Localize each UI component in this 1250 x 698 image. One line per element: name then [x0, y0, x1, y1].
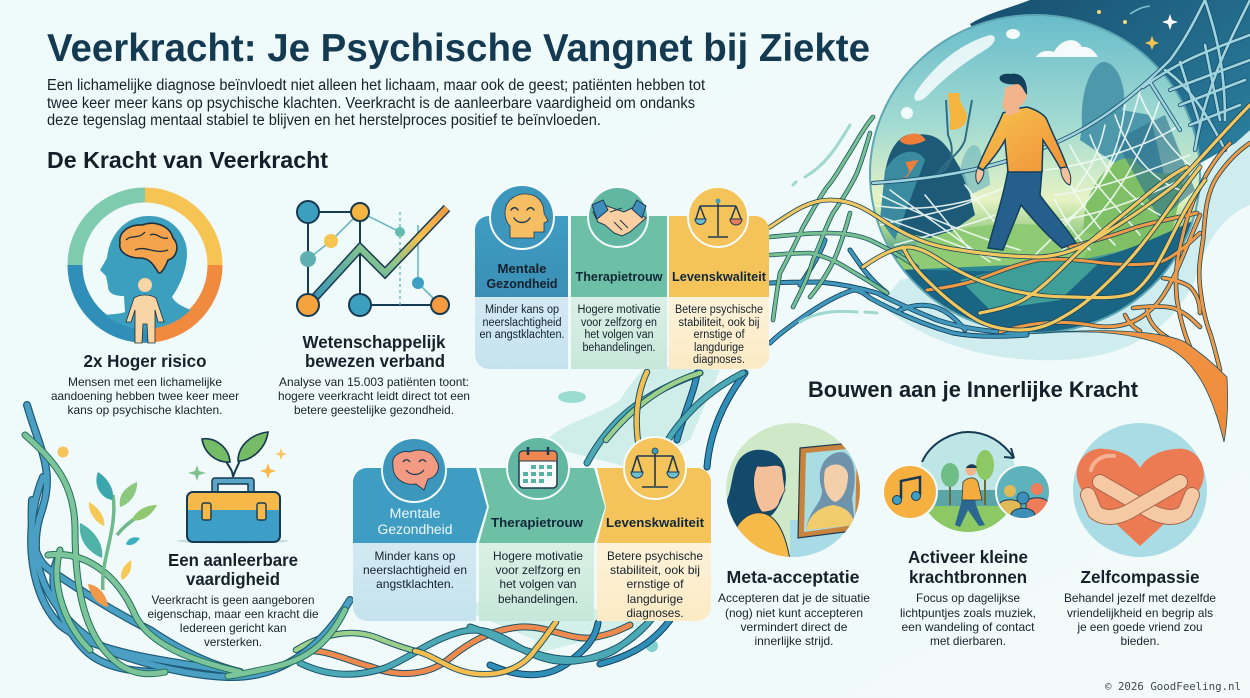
card: levenskwaliteit: diagnoses.: [693, 354, 745, 366]
heading: Bouwen aan je Innerlijke Kracht: Bouwen aan je Innerlijke Kracht: [808, 377, 1139, 402]
card: levenskwaliteit: Betere psychische: [607, 549, 703, 563]
hands: [976, 167, 1071, 185]
panel: activeer kleine krachtbronnen: [883, 432, 1050, 648]
card: levenskwaliteit: ernstige of: [626, 577, 684, 591]
card: mentale gezondheid: Gezondheid: [378, 522, 452, 537]
card: levenskwaliteit: langdurige: [627, 592, 683, 606]
card: therapietrouw: Hogere motivatie: [578, 304, 660, 316]
card: therapietrouw: Therapietrouw: [491, 515, 584, 530]
card: levenskwaliteit: [669, 187, 769, 369]
hero illustration: person in bubble on safety net: [770, 0, 1250, 442]
card: mentale gezondheid: Mentale: [390, 506, 440, 521]
body text: [1064, 591, 1216, 648]
card: mentale gezondheid: Gezondheid: [486, 277, 558, 291]
icon: network chart: [297, 201, 449, 316]
card: mentale gezondheid: en angstklachten.: [480, 329, 564, 341]
panel: benefit cards bottom row: [353, 437, 711, 621]
body text: vriendelijkheid en begrip als: [1067, 606, 1213, 620]
heading: krachtbronnen: [909, 567, 1027, 587]
stars: [1097, 6, 1178, 50]
card: mentale gezondheid: [475, 185, 568, 369]
body text: Mensen met een lichamelijke: [68, 375, 222, 389]
body text: je een goede vriend zou: [1077, 620, 1202, 634]
body text: [51, 375, 239, 417]
heading: [168, 550, 298, 589]
heading: Meta-acceptatie: [726, 567, 860, 587]
icon: woman looking in mirror: [726, 423, 870, 560]
card: levenskwaliteit: Levenskwaliteit: [606, 515, 705, 530]
heading: [908, 547, 1028, 587]
card: therapietrouw: Hogere motivatie: [493, 549, 583, 563]
card: levenskwaliteit: Betere psychische: [675, 304, 763, 316]
card: levenskwaliteit: stabiliteit, ook bij: [678, 317, 760, 329]
heading: bewezen verband: [305, 351, 445, 371]
icon: walking, music and people: [883, 432, 1050, 535]
orange horn: [1027, 331, 1228, 442]
sweater: [978, 107, 1067, 172]
card: mentale gezondheid: Mentale: [498, 262, 547, 276]
decorative dashes: [793, 125, 877, 322]
heading: Activeer kleine: [908, 547, 1028, 567]
copyright footer: © 2026 GoodFeeling.nl: [1105, 680, 1241, 693]
body text: [718, 591, 870, 648]
card: levenskwaliteit: stabiliteit, ook bij: [610, 563, 700, 577]
head: [1003, 82, 1027, 116]
heading: Zelfcompassie: [1080, 567, 1200, 587]
intro text: deze tegenslag mentaal stabiel te blijven en het herstelproces positief te beïnvloeden.: [47, 112, 601, 129]
icon: toolbox with sprout: [177, 432, 289, 544]
card: therapietrouw: [571, 187, 667, 369]
panel: meta-acceptatie: [718, 423, 870, 648]
body text: innerlijke strijd.: [754, 634, 834, 648]
bubble highlights: [870, 15, 1200, 333]
card: mentale gezondheid: neerslachtigheid en: [363, 563, 467, 577]
body text: met dierbaren.: [930, 634, 1006, 648]
card: mentale gezondheid: angstklachten.: [376, 577, 454, 591]
body text: [900, 591, 1036, 648]
body text: Iedereen gericht kan: [180, 621, 286, 635]
pale swoosh under the hero: [880, 130, 1250, 360]
heading: vaardigheid: [186, 569, 280, 589]
panel: een aanleerbare vaardigheid: [148, 432, 319, 649]
heading: De Kracht van Veerkracht: De Kracht van Veerkracht: [47, 147, 328, 173]
body text: [278, 375, 470, 417]
icon: ring with head, brain and person: [75, 195, 215, 343]
card: therapietrouw: behandelingen.: [498, 592, 578, 606]
bubble: [870, 15, 1200, 335]
intro text: Een lichamelijke diagnose beïnvloedt niet alleen het lichaam, maar ook de geest; patiënten hebben tot: [47, 77, 706, 94]
card: therapietrouw: het volgen van: [584, 329, 654, 341]
card: therapietrouw: voor zelfzorg en: [581, 317, 657, 329]
white net inside bubble: [872, 90, 1190, 262]
intro text: [47, 77, 706, 129]
sky strands: [873, 0, 1250, 183]
body text: Veerkracht is geen aangeboren: [152, 593, 314, 607]
heading: Wetenschappelijk: [302, 332, 446, 352]
body text: Analyse van 15.003 patiënten toont:: [279, 375, 469, 389]
card: levenskwaliteit: diagnoses.: [626, 606, 684, 620]
body text: lichtpuntjes zoals muziek,: [900, 606, 1036, 620]
card: mentale gezondheid: [353, 438, 487, 621]
body text: vermindert direct de: [740, 620, 848, 634]
card: mentale gezondheid: Minder kans op: [374, 549, 456, 563]
card: mentale gezondheid: neerslachtigheid: [482, 317, 562, 329]
middle strand band behind cards: [296, 365, 745, 675]
card: therapietrouw: voor zelfzorg en: [496, 563, 580, 577]
body text: Focus op dagelijkse: [916, 591, 1020, 605]
hair: [1000, 74, 1027, 95]
heading: 2x Hoger risico: [84, 351, 206, 371]
card: levenskwaliteit: langdurige: [694, 342, 744, 354]
panel: zelfcompassie: [1064, 423, 1216, 648]
body text: eigenschap, maar een kracht die: [148, 607, 319, 621]
intro text: twee keer meer kans op psychische klachten. Veerkracht is de aanleerbare vaardigheid om ondanks: [47, 95, 695, 112]
panel: benefit cards top row: [475, 185, 769, 369]
card: mentale gezondheid: Minder kans op: [485, 304, 559, 316]
left vines with leaves: [25, 405, 350, 677]
net strands: [770, 105, 1250, 370]
body text: aandoening hebben twee keer meer: [51, 389, 239, 403]
body text: bieden.: [1120, 634, 1160, 648]
card: therapietrouw: [479, 437, 605, 621]
card: levenskwaliteit: ernstige of: [694, 329, 745, 341]
body text: Behandel jezelf met dezelfde: [1064, 591, 1216, 605]
panel: 2x hoger risico: [51, 195, 239, 417]
body text: kans op psychische klachten.: [68, 403, 222, 417]
body text: betere geestelijke gezondheid.: [294, 403, 454, 417]
heading: [302, 332, 446, 371]
card: levenskwaliteit: [597, 437, 711, 621]
night sky: [970, 0, 1250, 220]
walking man: [976, 74, 1076, 250]
body text: (nog) niet kunt accepteren: [725, 606, 863, 620]
body text: Accepteren dat je de situatie: [718, 591, 870, 605]
card: therapietrouw: het volgen van: [500, 577, 576, 591]
body text: hogere veerkracht leidt direct tot een: [278, 389, 470, 403]
title: Veerkracht: Je Psychische Vangnet bij Ziekte: [47, 27, 870, 70]
card: therapietrouw: Therapietrouw: [576, 270, 663, 284]
card: levenskwaliteit: Levenskwaliteit: [672, 270, 767, 284]
icon: arms hugging heart: [1073, 423, 1207, 557]
body text: [148, 593, 319, 649]
heading: Een aanleerbare: [168, 550, 298, 570]
body text: versterken.: [204, 635, 262, 649]
card: therapietrouw: behandelingen.: [582, 342, 656, 354]
panel: wetenschappelijk bewezen verband: [278, 201, 470, 417]
body text: een wandeling of contact: [902, 620, 1035, 634]
legs: [988, 170, 1076, 250]
